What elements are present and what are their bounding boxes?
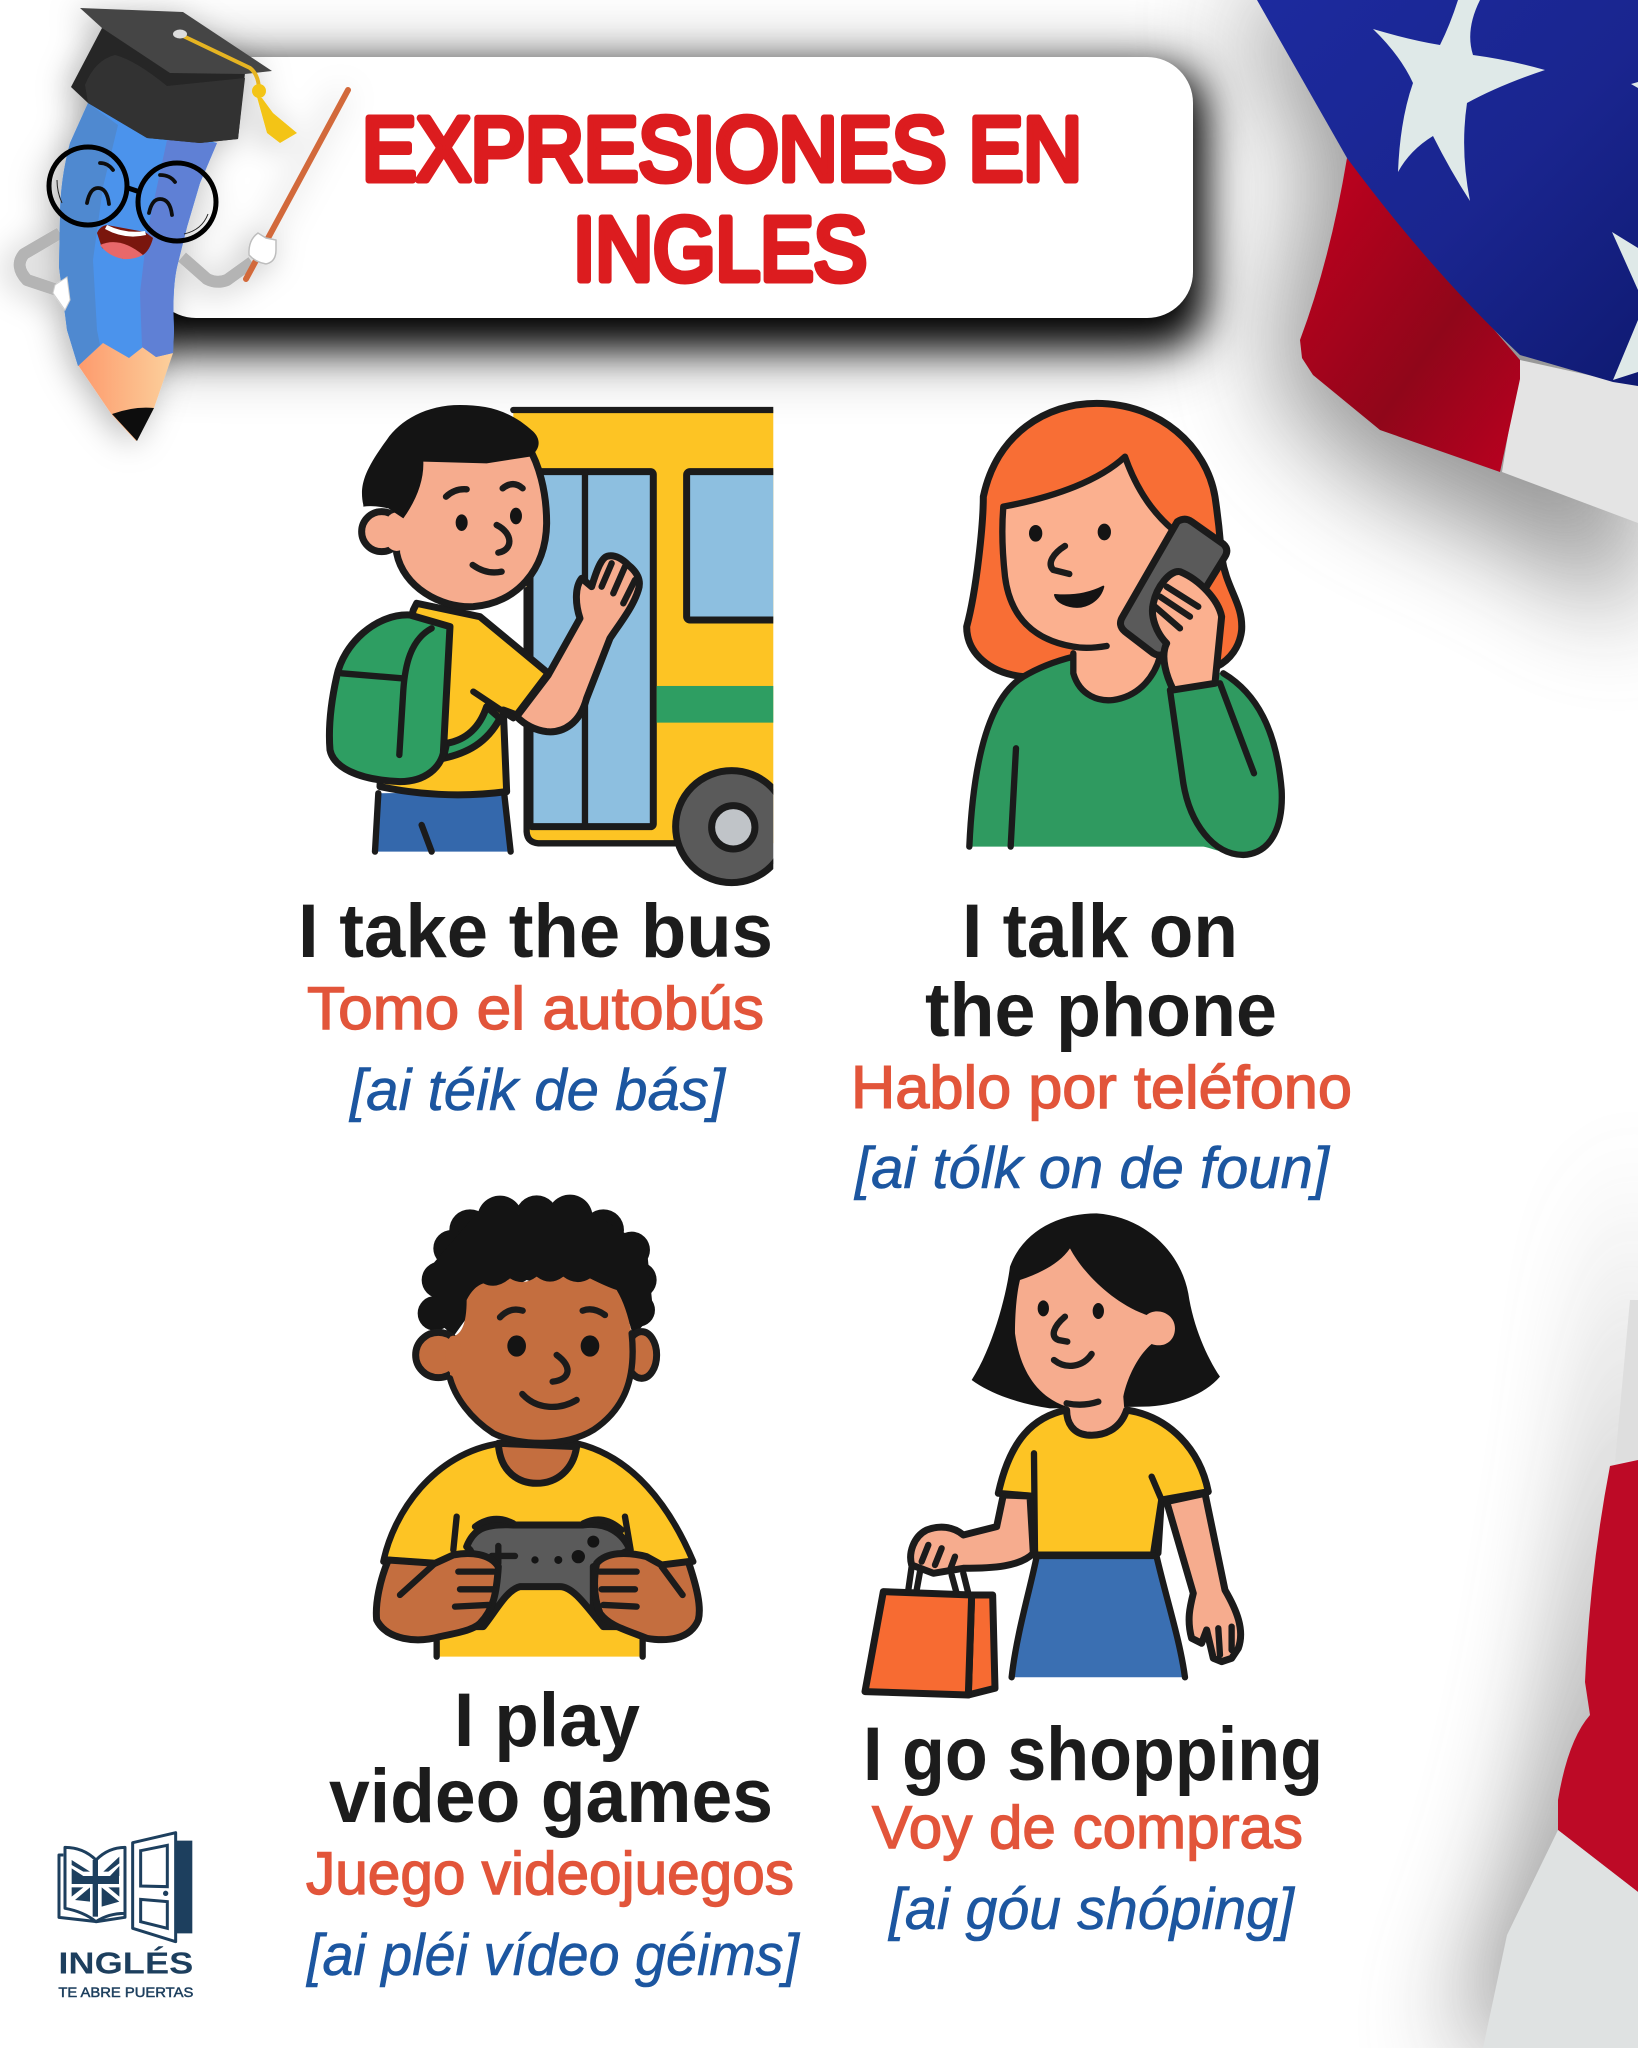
stars	[1373, 0, 1545, 201]
skirt	[1012, 1557, 1185, 1677]
title: EXPRESIONES EN	[362, 100, 1082, 200]
title	[362, 100, 1082, 300]
heading: I talk on the phone: the phone	[925, 968, 1277, 1053]
icon: door	[177, 1841, 192, 1933]
left arm	[20, 233, 60, 290]
graduation cap	[71, 28, 245, 143]
heading: I take the bus: I take the bus	[298, 889, 773, 974]
translation: Hablo por teléfono: Hablo por teléfono	[851, 1054, 1352, 1121]
glasses	[49, 147, 216, 241]
illustration: boy and bus	[329, 405, 788, 883]
heading: I talk on the phone: I talk on	[962, 889, 1238, 974]
white stripe	[1502, 360, 1638, 523]
pointer	[246, 90, 348, 279]
heading: I talk on the phone	[925, 889, 1277, 1053]
bag	[908, 1567, 968, 1593]
left hand	[53, 277, 70, 310]
heading: I play video games: I play	[454, 1678, 640, 1763]
pencil body	[59, 103, 217, 366]
illustration: girl on phone	[967, 403, 1282, 855]
flag drop shadows	[1225, 0, 1638, 2048]
translation: Juego videojuegos: Juego videojuegos	[306, 1840, 794, 1907]
translation: Voy de compras: Voy de compras	[872, 1794, 1303, 1861]
shirt	[998, 1410, 1208, 1555]
red stripe	[1300, 158, 1520, 472]
wordmark: INGLÉS	[58, 1945, 193, 1980]
pronunciation: ai tólk on de foun: [ai tólk on de foun]	[853, 1136, 1331, 1201]
pencil wood and tip	[78, 335, 173, 441]
hands	[376, 1553, 498, 1640]
logo: Inglés te abre puertas	[58, 1833, 193, 2000]
pronunciation: ai pléi vídeo géims: [ai pléi vídeo géims]	[305, 1923, 801, 1988]
right hand	[249, 233, 276, 264]
icon: open book with flag	[59, 1847, 125, 1922]
heading: I play video games	[329, 1678, 773, 1839]
eyes	[87, 163, 175, 215]
title banner	[150, 57, 1193, 318]
right arm	[182, 257, 252, 282]
flag: top right	[1257, 0, 1638, 523]
illustration: girl shopping	[865, 1213, 1241, 1695]
pronunciation: ai téik de bás: [ai téik de bás]	[348, 1058, 727, 1123]
blue canton	[1257, 0, 1638, 386]
flag: bottom right	[1483, 1300, 1638, 2048]
title: INGLES	[573, 200, 867, 300]
illustration: boy with game controller	[376, 1195, 699, 1657]
icon: pencil mascot	[20, 8, 348, 441]
controller	[467, 1524, 630, 1627]
mouth	[97, 225, 153, 259]
translation: Tomo el autobús: Tomo el autobús	[307, 975, 764, 1042]
pronunciation: ai góu shóping: [ai góu shóping]	[887, 1877, 1296, 1942]
arms	[1167, 1493, 1241, 1662]
logo: Inglés te abre puertas: TE ABRE PUERTAS	[58, 1984, 193, 2000]
boy	[375, 792, 512, 852]
heading: I go shopping: I go shopping	[863, 1712, 1323, 1797]
banner shadow	[120, 62, 1202, 352]
heading: I play video games: video games	[329, 1754, 773, 1839]
bus	[513, 410, 788, 883]
